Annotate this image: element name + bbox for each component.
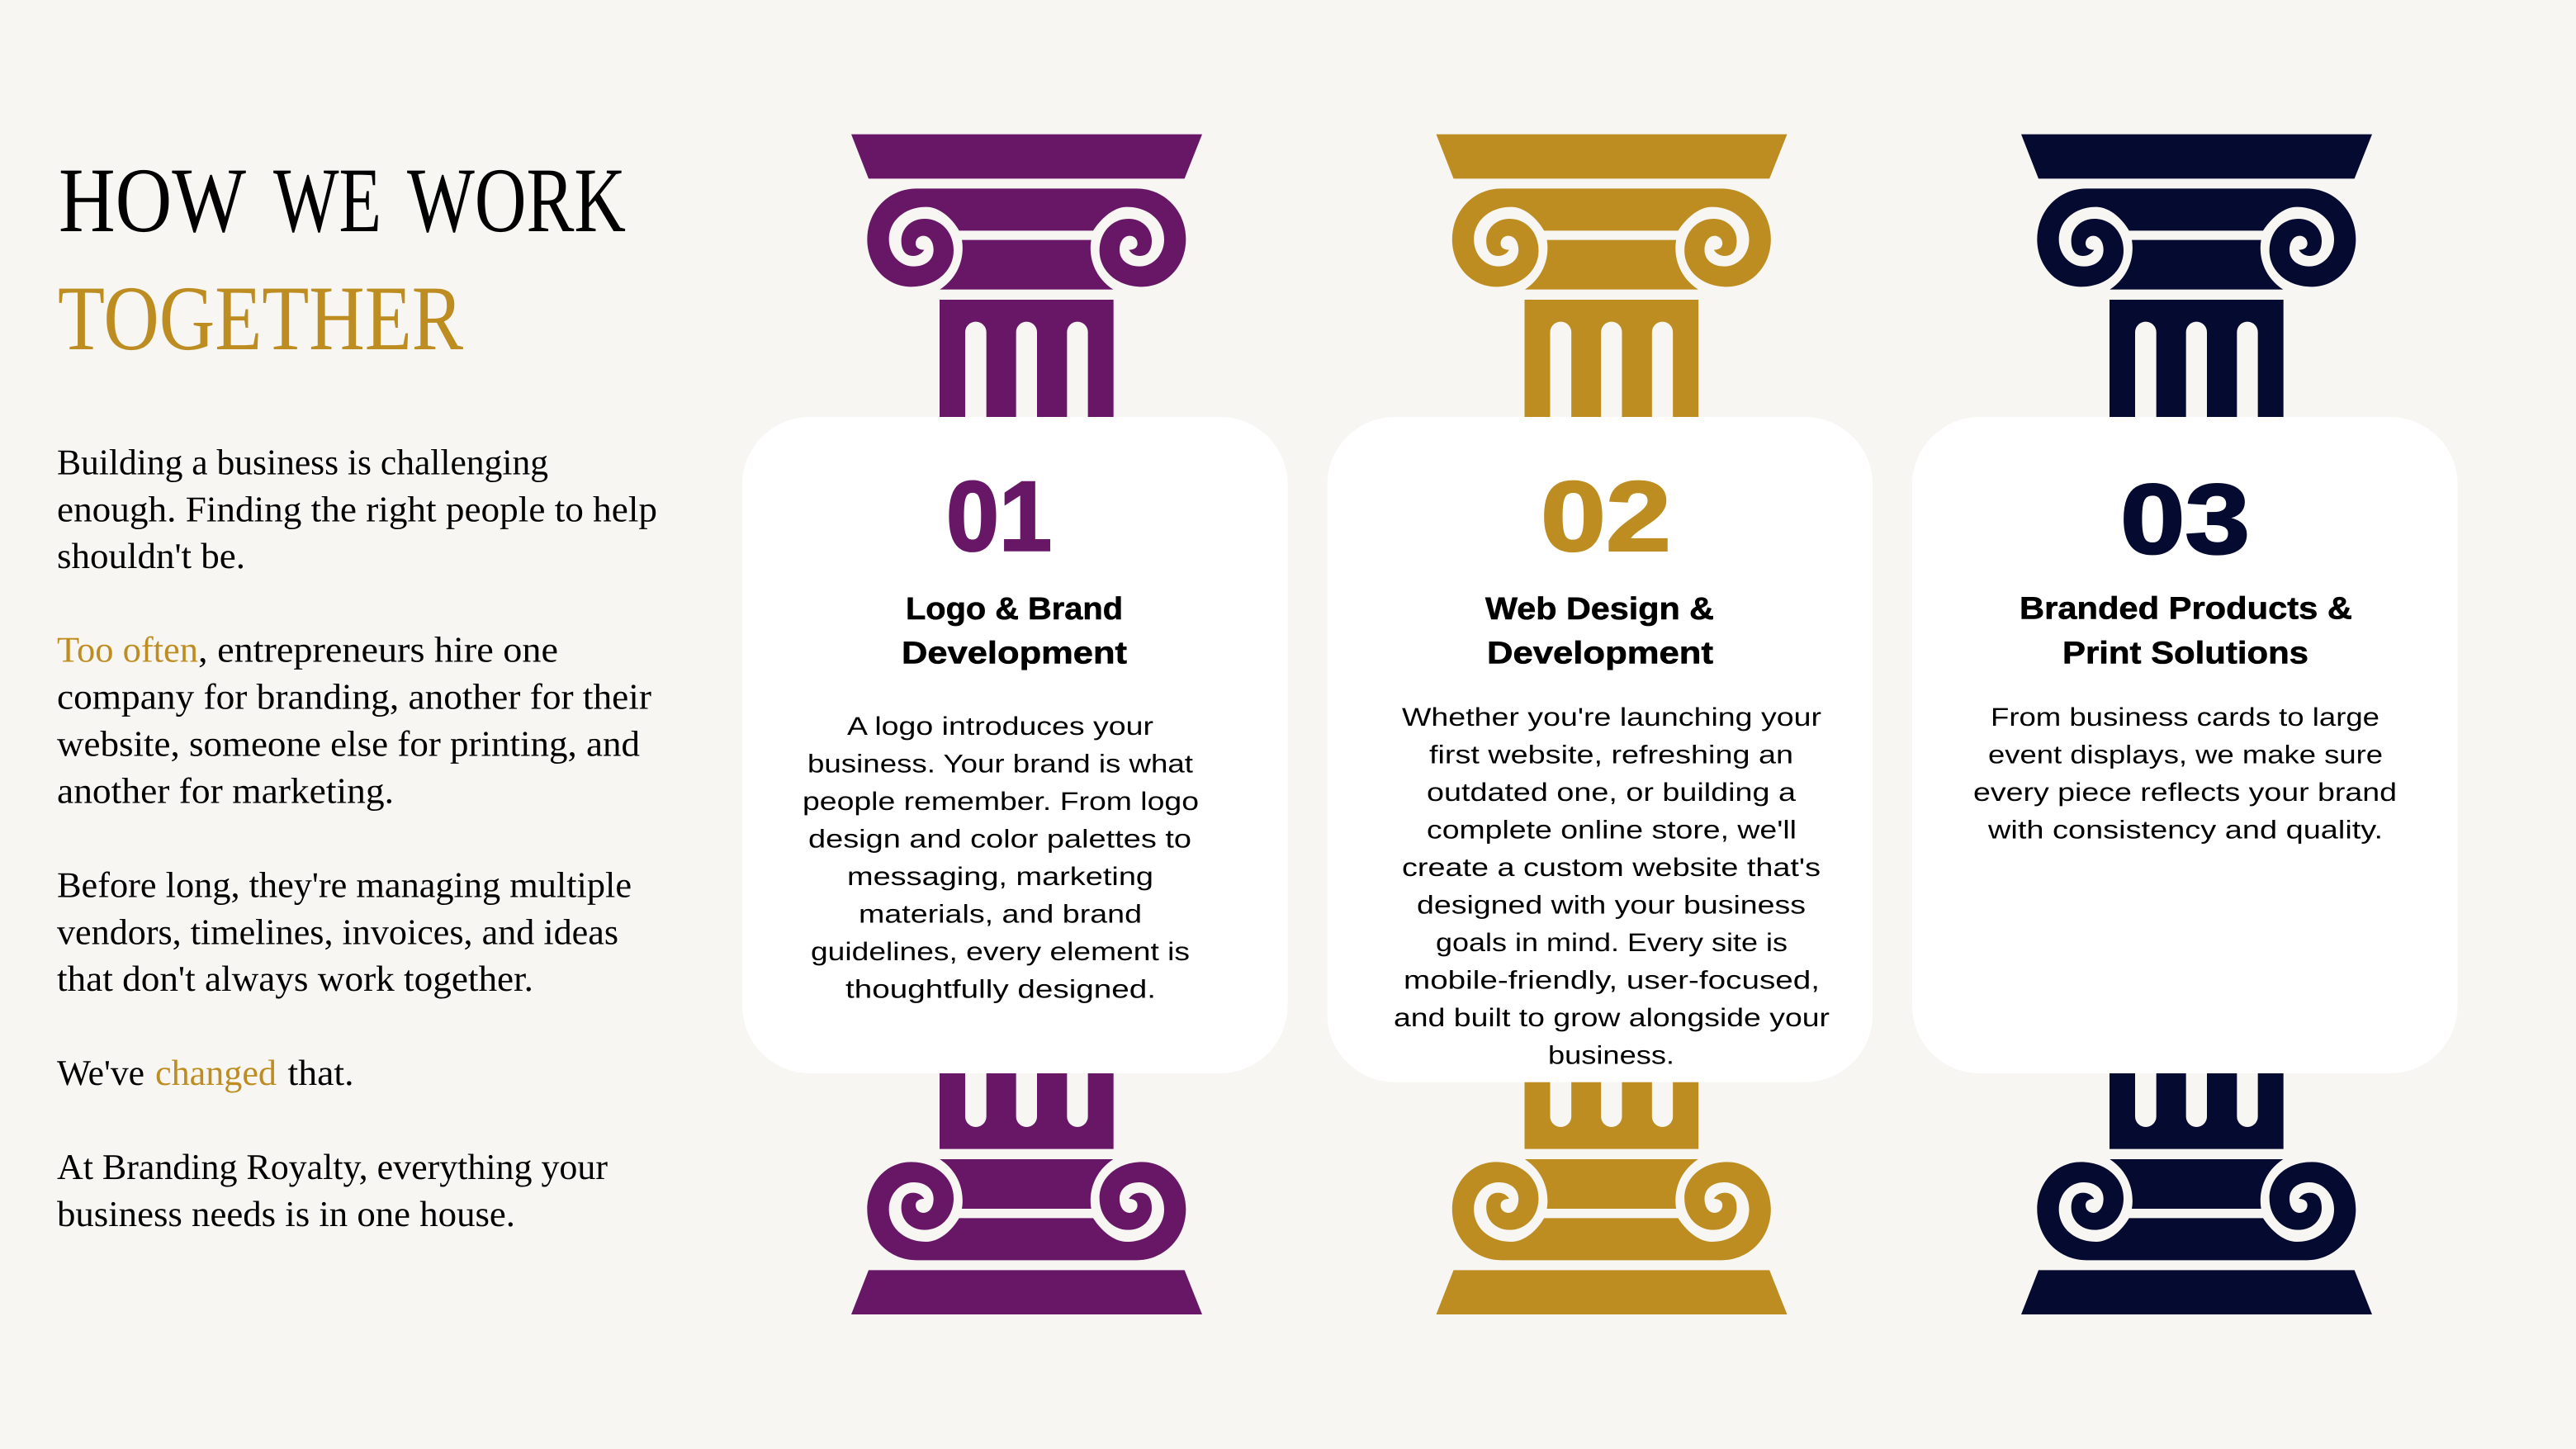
text block: card 01 body: messaging, marketing [847, 862, 1153, 891]
text block: paragraph four: We've [57, 1053, 144, 1093]
text block: card 03 body: event displays, we make sure [1988, 740, 2383, 769]
heading: web design: Web Design & [1485, 592, 1714, 627]
title: HOW [59, 149, 246, 252]
panel: intro text [57, 149, 657, 1234]
text block: card 03 body: with consistency and quality. [1987, 816, 2383, 844]
text block: paragraph four: changed [155, 1053, 277, 1093]
icon: purple column capital [851, 135, 1202, 421]
text block: paragraph three: that don't always work together. [57, 959, 533, 999]
icon: navy column capital [2021, 135, 2372, 421]
number 02: 02 [1541, 462, 1671, 572]
number 01: 01 [946, 462, 1052, 572]
heading: branded products: Branded Products & [2020, 591, 2352, 626]
icon: gold column capital [1436, 135, 1787, 421]
text block: card 03 body: From business cards to large [1991, 703, 2379, 732]
text block: card 02 body: first website, refreshing an [1429, 740, 1793, 769]
text block: paragraph two: website, someone else for printing, and [57, 724, 640, 765]
text block: card 01 body: thoughtfully designed. [845, 974, 1156, 1004]
text block: paragraph one: enough. Finding the right people to help [57, 489, 657, 530]
title: WORK [407, 149, 626, 252]
title [58, 149, 626, 370]
heading: branded products: Print Solutions [2062, 636, 2308, 670]
icon: navy column base [2021, 1028, 2372, 1314]
text block: card 01 body: business. Your brand is what [807, 750, 1193, 778]
text block: card 03 body [1973, 703, 2397, 844]
title: TOGETHER [58, 268, 463, 370]
text block: paragraph two: another for marketing. [57, 771, 394, 811]
text block: card 01 body: people remember. From logo [803, 787, 1199, 816]
text block: paragraph five [57, 1147, 608, 1234]
text block: paragraph two: company for branding, another for their [57, 677, 651, 717]
text block: card 02 body: complete online store, we'll [1427, 816, 1797, 844]
title: WE [273, 149, 381, 252]
heading: web design: Development [1487, 636, 1713, 670]
number 03: 03 [2120, 464, 2250, 575]
text block: card 02 body: Whether you're launching your [1402, 703, 1821, 732]
heading: logo and brand: Logo & Brand [906, 592, 1123, 627]
text block: card 02 body: goals in mind. Every site is [1436, 928, 1788, 957]
text block: card 02 body: outdated one, or building a [1427, 778, 1797, 807]
text block: card 02 body: business. [1548, 1040, 1674, 1070]
text block: paragraph two: , entrepreneurs hire one [198, 630, 558, 670]
text block: paragraph four: that. [287, 1053, 353, 1093]
panel: card 03 [1912, 417, 2458, 1073]
heading: web design [1485, 592, 1714, 670]
text block: paragraph three: Before long, they're managing multiple [57, 865, 632, 906]
text block: card 01 body: guidelines, every element is [811, 937, 1190, 966]
text block: card 01 body: materials, and brand [859, 900, 1142, 928]
text block: card 01 body [803, 712, 1199, 1004]
text block: card 01 body: A logo introduces your [847, 712, 1153, 741]
text block: card 02 body: and built to grow alongside your [1394, 1003, 1830, 1032]
text block: paragraph four [57, 1053, 353, 1093]
text block: paragraph three [57, 865, 632, 999]
text block: paragraph one: Building a business is challenging [57, 443, 548, 483]
text block: paragraph five: business needs is in one house. [57, 1194, 515, 1234]
text block: paragraph two: Too often [57, 630, 198, 670]
text block: card 02 body: designed with your business [1417, 890, 1806, 920]
heading: logo and brand: Development [902, 636, 1127, 670]
panel: card 01 [742, 417, 1288, 1073]
heading: branded products [2020, 591, 2352, 670]
heading: logo and brand [902, 592, 1127, 670]
text block: paragraph five: At Branding Royalty, everything your [57, 1147, 608, 1187]
text block: card 01 body: design and color palettes to [808, 824, 1191, 854]
text block: card 03 body: every piece reflects your brand [1973, 778, 2397, 807]
text block: paragraph one: shouldn't be. [57, 536, 245, 576]
text block: card 02 body: mobile-friendly, user-focused, [1404, 966, 1820, 994]
text block: card 02 body [1394, 703, 1830, 1070]
panel: card 02 [1328, 417, 1873, 1082]
text block: paragraph three: vendors, timelines, invoices, and ideas [57, 912, 618, 952]
icon: purple column base [851, 1028, 1202, 1314]
text block: card 02 body: create a custom website that's [1402, 853, 1821, 882]
text block: paragraph one [57, 443, 657, 576]
text block: paragraph two [57, 630, 651, 811]
icon: gold column base [1436, 1028, 1787, 1314]
